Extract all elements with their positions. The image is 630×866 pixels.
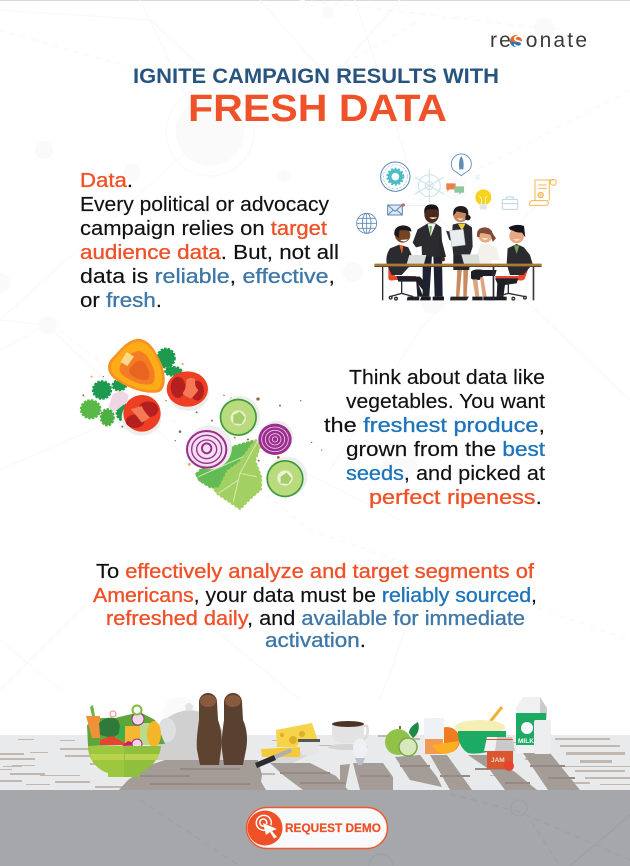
icon: spark <box>474 174 481 181</box>
title <box>133 64 499 129</box>
text block: vegetable analogy: the freshest produce , <box>324 415 545 437</box>
text block: data intro <box>80 170 339 312</box>
grey floor band <box>0 790 630 866</box>
cucumber slice bottom <box>266 457 307 497</box>
lettuce leaf <box>196 440 261 509</box>
icon: rocket badge <box>451 154 471 176</box>
coffee cup <box>328 721 368 750</box>
icon: speech bubbles <box>443 177 467 201</box>
cilantro leaves <box>81 349 181 425</box>
text block: data intro: campaign relies on target <box>80 218 327 240</box>
salt and pepper shakers <box>197 693 247 765</box>
text block: vegetable analogy: perfect ripeness . <box>369 487 542 509</box>
button: request demo <box>246 808 388 848</box>
shadow: jam bowl <box>468 755 537 790</box>
text block: data intro: Every political or advocacy <box>80 194 329 216</box>
shadow: cheese <box>270 763 348 790</box>
red onion slice left <box>186 425 232 469</box>
shadow: shaker <box>244 760 262 790</box>
text block: key requirements <box>93 561 537 652</box>
text block: data intro: Data. <box>80 170 133 192</box>
person: seated man left <box>386 225 427 300</box>
text block: data intro: or fresh . <box>80 290 162 312</box>
tomato slice right <box>167 371 209 411</box>
chair bases <box>389 280 526 300</box>
icon: envelope <box>388 203 425 215</box>
shadow: cloche and bowl <box>119 758 266 790</box>
icon: briefcase <box>502 197 518 209</box>
person: standing man <box>413 204 446 300</box>
red onion slice right <box>258 421 293 455</box>
jam jar <box>484 737 515 771</box>
salad bowl <box>86 705 165 777</box>
milk carton and glass: MILK <box>518 738 534 745</box>
icon: certificate scroll <box>529 179 556 205</box>
title line 1: IGNITE CAMPAIGN RESULTS WITH <box>133 64 499 88</box>
orange pepper <box>108 339 165 393</box>
shadow: apple <box>395 755 442 787</box>
jam jar: JAM <box>491 757 505 764</box>
shadow: cup <box>340 764 350 790</box>
shadow: glass <box>430 755 472 790</box>
floor network pattern <box>140 794 630 866</box>
bowl of porridge <box>455 707 506 754</box>
text block: key requirements: To effectively analyze and target segments of <box>96 561 534 583</box>
egg in cup <box>353 738 367 765</box>
text block: key requirements: activation . <box>265 630 366 652</box>
person: standing woman with tablet <box>446 206 473 300</box>
shadow: egg <box>353 763 393 790</box>
text block: vegetable analogy: grown from the best <box>346 439 545 461</box>
text block: vegetable analogy <box>324 367 545 509</box>
icon: light bulb <box>475 189 491 209</box>
tomato slice left <box>122 395 162 436</box>
text block: data intro: data is reliable , effective , <box>80 266 335 288</box>
cucumber slice top <box>220 396 260 436</box>
text block: key requirements: refreshed daily , and available for immediate <box>106 608 525 630</box>
table scene <box>0 693 630 866</box>
table <box>374 264 542 300</box>
cheese board <box>255 723 320 768</box>
serving cloche <box>152 703 227 760</box>
milk carton and glass <box>516 697 551 754</box>
icon: globe <box>357 213 377 233</box>
juice glass with orange <box>424 718 460 754</box>
illustration: fresh vegetables <box>81 339 322 509</box>
text block: vegetable analogy: vegetables. You want <box>346 391 545 413</box>
text block: data intro: audience data . But, not all <box>80 242 339 264</box>
resonate logo: resonate <box>490 29 587 52</box>
laptops <box>407 254 480 264</box>
scattered pepper flecks <box>82 363 322 466</box>
button label: REQUEST DEMO <box>285 821 381 835</box>
person: seated man right <box>492 225 533 300</box>
text block: vegetable analogy: Think about data like <box>349 367 545 389</box>
cast shadows <box>119 753 580 790</box>
text block: key requirements: Americans , your data must be reliably sourced , <box>93 585 537 607</box>
icon: click cursor <box>248 810 282 846</box>
shadow: milk <box>523 753 580 790</box>
illustration: business team at table <box>357 154 556 300</box>
wooden table top <box>0 735 630 790</box>
text block: vegetable analogy: seeds, and picked at <box>346 463 545 485</box>
title line 2: FRESH DATA <box>188 87 447 129</box>
onion sliver <box>108 391 129 412</box>
green apple <box>385 722 419 756</box>
icon: ship wheel <box>415 169 444 202</box>
person: seated woman <box>471 227 500 300</box>
icon: gear <box>381 162 410 191</box>
